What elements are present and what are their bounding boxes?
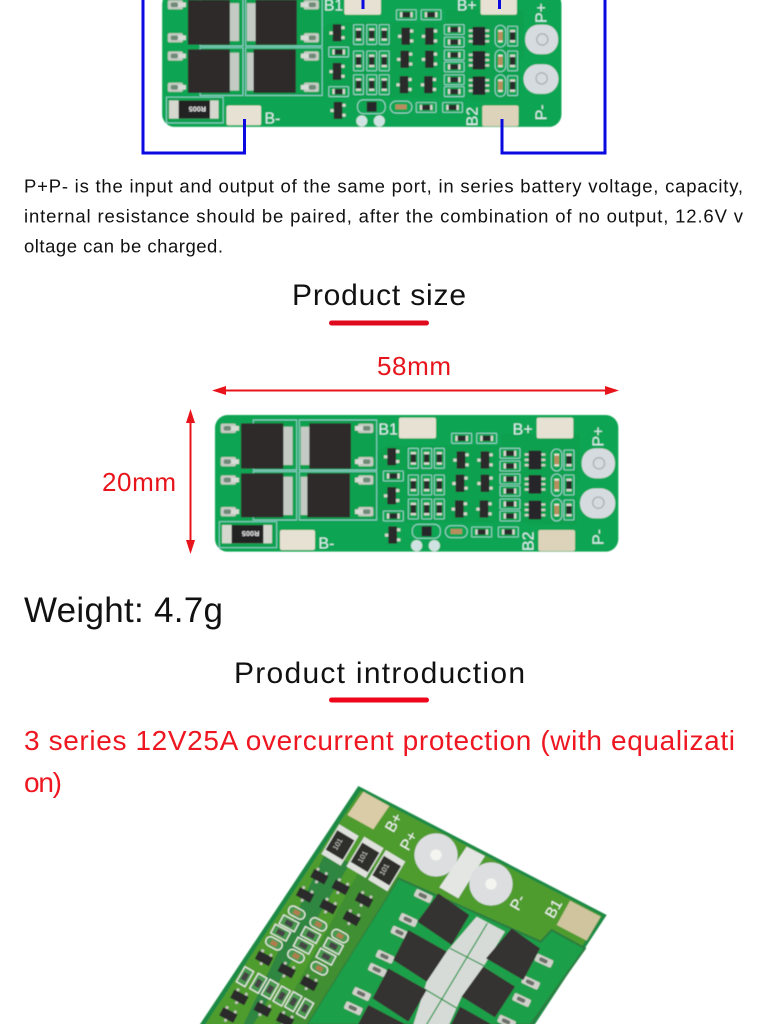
silkscreen labels: B+: [382, 810, 406, 835]
silkscreen labels: P-: [534, 104, 551, 120]
silkscreen labels: B1: [378, 421, 398, 438]
width dimension: [212, 351, 619, 395]
angled circuit board photo: [198, 786, 607, 1024]
height dimension: [102, 409, 195, 554]
terminal rings: [414, 833, 458, 877]
silkscreen labels: B1: [542, 897, 566, 921]
shunt resistors: 101: [356, 849, 370, 864]
product introduction text: 3 series 12V25A overcurrent protection (with equalizati: [24, 725, 735, 756]
blue wiring diagram: [143, 0, 605, 153]
height dimension: 20mm: [102, 467, 176, 497]
shunt resistors: [321, 824, 405, 891]
silkscreen labels: P+: [397, 829, 421, 854]
product introduction text: on): [24, 767, 62, 798]
shunt resistors: 101: [331, 837, 345, 852]
wiring description: P+P- is the input and output of the same port, in series battery voltage, capacity,: [24, 176, 743, 196]
wiring description: internal resistance should be paired, after the combination of no output, 12.6V v: [24, 206, 744, 226]
silkscreen labels: [242, 421, 607, 552]
silkscreen labels: B2: [464, 107, 481, 126]
heading: product introduction: Product introduction: [234, 657, 525, 690]
silkscreen labels: B2: [520, 531, 537, 551]
silkscreen labels: [189, 0, 551, 128]
product introduction text: [24, 725, 735, 798]
board body: [198, 786, 607, 1024]
silkscreen labels: P-: [590, 529, 607, 545]
mosfets: [353, 893, 540, 1024]
silkscreen labels: P-: [507, 892, 529, 914]
silkscreen labels: P+: [534, 3, 551, 23]
wiring description: [24, 176, 744, 256]
width dimension: 58mm: [377, 351, 451, 381]
silkscreen labels: B-: [318, 535, 334, 552]
silkscreen labels: B+: [513, 421, 533, 438]
silkscreen labels: P+: [590, 427, 607, 447]
top circuit board photo: [162, 0, 561, 128]
size circuit board photo: [215, 415, 618, 552]
solder pads: [347, 792, 389, 829]
wiring description: oltage can be charged.: [24, 236, 223, 256]
weight: Weight: 4.7g: [24, 591, 223, 630]
silkscreen labels: R005: [242, 529, 259, 538]
shunt resistors: 101: [377, 862, 391, 877]
silkscreen labels: [382, 810, 566, 921]
inner ground plane: [307, 878, 585, 1024]
heading: product size: Product size: [292, 279, 466, 312]
small chips and resistors: [218, 866, 375, 1024]
mosfet terminals: [343, 889, 554, 1024]
silkscreen labels: R005: [189, 104, 206, 113]
silkscreen labels: B-: [264, 111, 280, 128]
silver copper band: [412, 917, 505, 1024]
